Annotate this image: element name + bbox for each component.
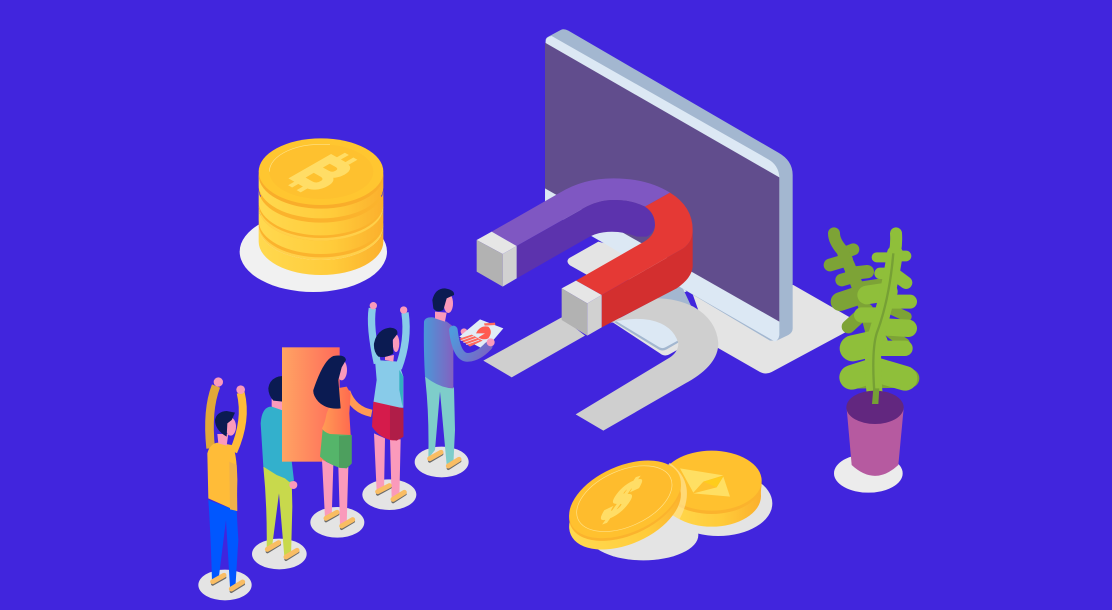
front leaf [852,233,910,400]
people queue [198,288,503,600]
magnet purple arm [492,178,670,278]
bitcoin coin stack [240,138,387,292]
person discs [198,447,469,600]
magnet red end cap [562,281,602,336]
top coin [259,138,383,218]
person 2 teal sweater [261,376,298,559]
left plate [567,242,663,284]
monitor bezel [545,36,779,342]
person 4 blue top red skirt [370,302,407,502]
dollar symbol: $ [588,466,655,533]
monitor screen [545,43,779,322]
orange panel [282,347,340,462]
plant stem [873,253,893,404]
magnet with shadow [477,178,718,431]
monitor on its base [545,29,853,373]
monitor back edge [545,29,793,341]
person 1 yellow sweater [207,377,245,591]
magnet shadow [483,298,718,431]
plant [830,233,910,493]
pot shadow [834,454,903,493]
upper foot [592,233,687,297]
magnet purple end cap [477,232,517,287]
pot [846,388,904,476]
lower coins [259,154,383,275]
bitcoin symbol: B [275,147,369,200]
lower plate [612,313,680,356]
ethereum symbol [680,468,730,497]
dollar coin [557,445,693,565]
coins pair [557,445,772,565]
person 3 orange top [313,355,372,528]
ethereum coin [661,451,762,527]
document [459,319,503,350]
person 5 holding document [424,288,503,468]
back leaf [830,233,910,379]
coin halo [667,466,683,517]
stand [630,237,693,313]
coin shadows [588,471,772,560]
base plate [690,285,853,373]
stack shadow [240,211,387,292]
lower foot [612,317,680,351]
magnet red arm [576,193,693,327]
